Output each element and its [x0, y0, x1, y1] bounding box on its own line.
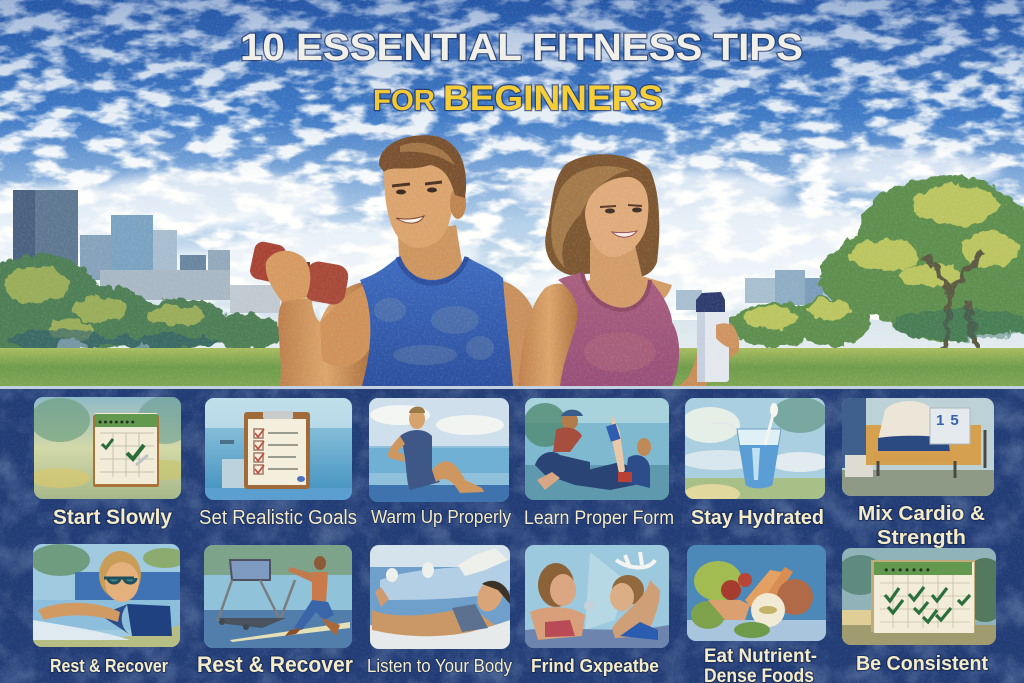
panel: be consistent — [842, 548, 996, 672]
panel: eat nutrient-dense foods — [687, 545, 826, 683]
white water bottle — [696, 292, 729, 382]
man's hand — [266, 251, 310, 302]
red dumbbell — [248, 240, 350, 306]
paint grain — [0, 0, 1024, 386]
icon: clipboard checklist — [244, 411, 310, 489]
trees right — [730, 177, 1024, 350]
panel: start slowly — [30, 396, 193, 529]
city skyline left — [13, 190, 280, 313]
panel: warm up properly — [369, 398, 511, 527]
figure stretching — [388, 407, 484, 493]
label — [858, 503, 985, 549]
label: Learn Proper Form — [524, 508, 674, 529]
woman's hair — [545, 154, 659, 278]
label: Start Slowly — [53, 506, 172, 529]
panel: stay hydrated — [680, 397, 830, 529]
swimmer with sunglasses — [33, 551, 172, 640]
grass field — [0, 348, 1024, 386]
label: Mix Cardio & — [858, 503, 985, 525]
icon: calendar with many checks — [871, 560, 975, 633]
man's bicep — [320, 282, 372, 367]
panel: rest and recover (treadmill) — [197, 545, 353, 677]
woman's face — [585, 177, 648, 257]
label: Warm Up Properly — [371, 507, 511, 527]
man's neck — [398, 225, 462, 285]
title line 1: 10 ESSENTIAL FITNESS TIPS — [240, 27, 803, 69]
woman's right arm and hand — [678, 320, 739, 386]
two figures demonstrating form — [535, 410, 651, 490]
label: Set Realistic Goals — [199, 507, 357, 529]
woman's left arm — [518, 284, 580, 386]
city skyline right — [676, 270, 832, 310]
label: Rest & Recover — [197, 652, 353, 677]
label — [704, 646, 817, 683]
man's right shoulder — [503, 280, 532, 386]
panel: listen to your body — [367, 545, 512, 676]
label: Rest & Recover — [50, 656, 168, 676]
panel: find expertise — [525, 545, 669, 676]
title line 2: BEGINNERS — [443, 79, 663, 118]
title line 2: FOR — [373, 85, 435, 117]
icon: calendar with checks — [93, 413, 159, 487]
man with dumbbell — [248, 135, 535, 386]
figure on bench with scoreboard — [873, 401, 985, 478]
tips section — [0, 386, 1024, 683]
label: Frind Gxpeatbe — [531, 656, 659, 676]
icon: calendar with checks: ●●●●●●● — [98, 419, 136, 426]
label: Be Consistent — [856, 653, 988, 675]
panel: rest and recover (pool) — [30, 544, 187, 676]
label: Stay Hydrated — [691, 507, 824, 529]
woman's pink tank top — [558, 272, 679, 386]
man's head — [379, 135, 466, 248]
label: Eat Nutrient- — [704, 646, 817, 667]
figure lying down — [372, 548, 510, 636]
panel: mix cardio and strength — [842, 398, 994, 549]
icon: calendar with many checks: ●●●●●●● — [884, 565, 933, 574]
panel: set realistic goals — [199, 398, 357, 529]
trees left — [0, 254, 283, 355]
icon: vegetables and fruit — [691, 561, 813, 638]
woman's neck and chest — [586, 240, 672, 308]
figure on bench with scoreboard: 15 — [936, 412, 965, 429]
treadmill and runner — [218, 556, 340, 636]
woman with water bottle — [518, 154, 739, 386]
sky with clouds — [0, 0, 1024, 386]
two women and decor — [530, 552, 660, 640]
title heading — [240, 27, 803, 118]
fingers — [716, 323, 729, 348]
hero scene: sky, skyline and park — [0, 0, 1024, 386]
man's blue tank top — [360, 257, 513, 386]
man's raised arm — [278, 282, 374, 386]
label: Listen to Your Body — [367, 656, 512, 676]
label: Strength — [877, 527, 966, 549]
panel: learn proper form — [523, 398, 674, 529]
navy section background — [0, 386, 1024, 683]
icon: glass of water — [712, 403, 781, 488]
